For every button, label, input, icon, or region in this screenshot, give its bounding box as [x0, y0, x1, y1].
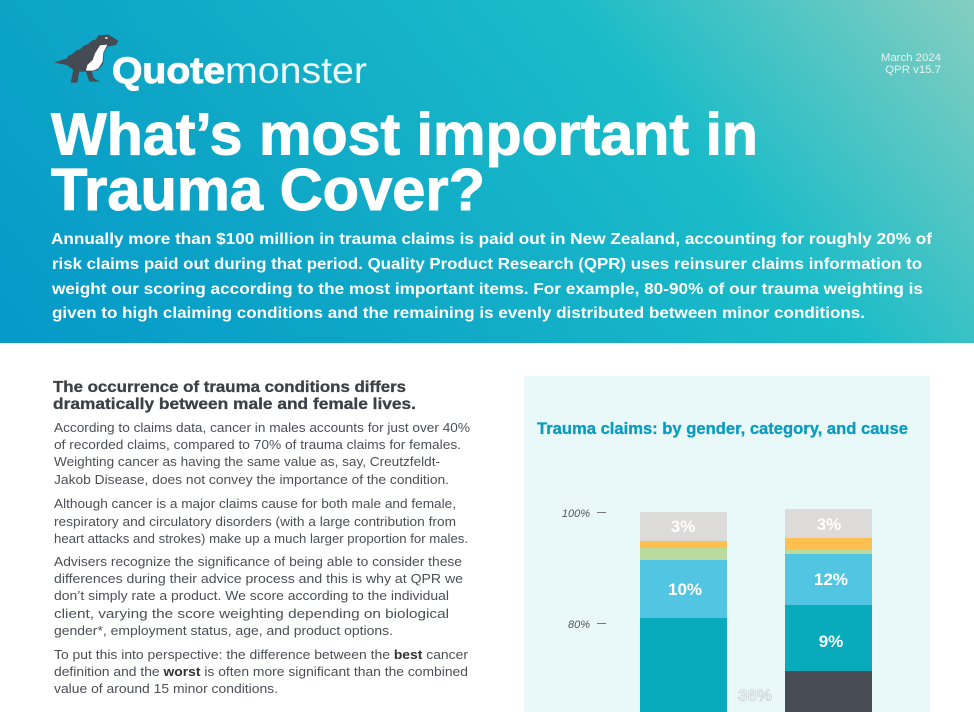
body paragraph 4: value of around 15 minor conditions. [54, 681, 278, 696]
y axis labels [562, 508, 606, 631]
body paragraph 2 [54, 496, 468, 546]
body paragraph 2: Although cancer is a major claims cause for both male and female, [54, 496, 456, 511]
body paragraph 2: heart attacks and strokes) make up a much larger proportion for males. [54, 531, 468, 546]
body paragraph 1: Jakob Disease, does not convey the importance of the condition. [54, 472, 449, 487]
body paragraph 4 [54, 647, 469, 696]
stacked bar: second column [785, 509, 872, 712]
body paragraph 3: gender*, employment status, age, and product options. [54, 623, 393, 638]
body paragraph 3: don’t simply rate a product. We score according to the individual [54, 588, 449, 603]
intro paragraph: Annually more than $100 million in trauma claims is paid out in New Zealand, accounting for roughly 20% of [51, 231, 933, 248]
logo: Quotemonster [54, 35, 367, 91]
title: What’s most important in [51, 102, 758, 168]
intro paragraph: given to high claiming conditions and the remaining is evenly distributed between minor conditions. [52, 305, 865, 322]
intro paragraph: weight our scoring according to the most important items. For example, 80-90% of our trauma weighting is [51, 281, 923, 298]
chart heading: Trauma claims: by gender, category, and cause [537, 420, 908, 438]
header banner [0, 0, 974, 343]
body paragraph 3: Advisers recognize the significance of being able to consider these [54, 554, 462, 569]
section heading: The occurrence of trauma conditions differs [53, 379, 406, 396]
intro paragraph: risk claims paid out during that period. Quality Product Research (QPR) uses reinsurer claims information to [52, 256, 922, 273]
intro paragraph [51, 231, 933, 322]
body paragraph 1 [54, 420, 470, 487]
stacked bar: second column: 9% [819, 632, 843, 651]
stacked bar: second column: 12% [814, 570, 848, 589]
section heading [53, 379, 416, 413]
body paragraph 1: According to claims data, cancer in males accounts for just over 40% [54, 420, 470, 435]
left text column [53, 379, 470, 696]
logo wordmark: Quote: Quote [112, 50, 225, 91]
title [51, 102, 758, 223]
stacked bar: first column: 10% [668, 580, 702, 599]
faint outlined 36% label: 36% [738, 686, 772, 705]
body paragraph 3 [54, 554, 463, 638]
date and version [881, 52, 941, 76]
body paragraph 4: To put this into perspective: the difference between the best cancer [54, 647, 469, 662]
y axis labels: 80% [568, 619, 590, 631]
title: Trauma Cover? [51, 157, 485, 223]
stacked bar: second column: 3% [817, 515, 841, 534]
body paragraph 3: client, varying the score weighting depending on biological [54, 606, 449, 621]
stacked bar: first column [640, 512, 727, 712]
body paragraph 3: differences during their advice process and this is why at QPR we [54, 571, 463, 586]
icon: monster mascot [54, 35, 118, 83]
date and version: March 2024 [881, 52, 941, 64]
section heading: dramatically between male and female lives. [53, 396, 416, 413]
logo wordmark: monster: monster [225, 50, 367, 91]
panel: trauma claims chart [524, 376, 930, 712]
body paragraph 4: definition and the worst is often more significant than the combined [54, 664, 468, 679]
body paragraph 2: respiratory and circulatory disorders (with a large contribution from [54, 514, 456, 529]
body paragraph 1: Weighting cancer as having the same value as, say, Creutzfeldt- [54, 454, 440, 469]
y axis labels: 100% [562, 508, 590, 520]
body paragraph 1: of recorded claims, compared to 70% of trauma claims for females. [54, 437, 461, 452]
date and version: QPR v15.7 [885, 64, 941, 76]
stacked bar: first column: 3% [671, 517, 695, 536]
